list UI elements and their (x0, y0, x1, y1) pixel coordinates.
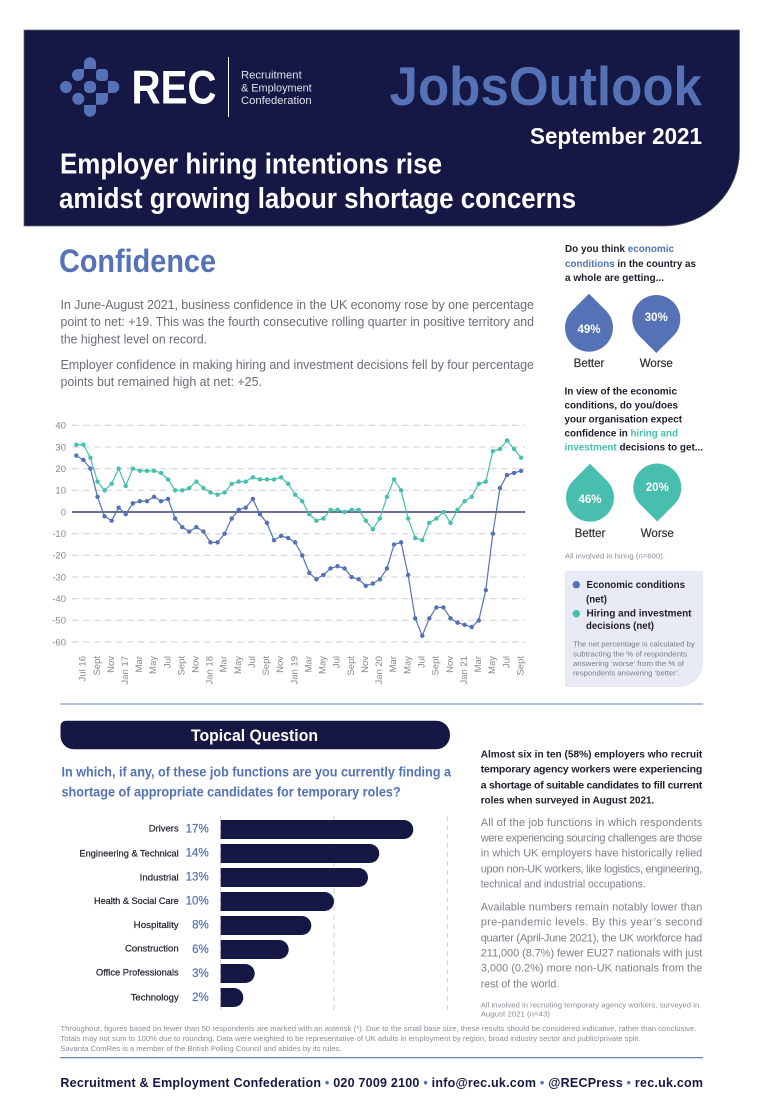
chart x axis labels: Jan 21 (459, 656, 470, 685)
footnotes: Savanta ComRes is a member of the British Polling Council and abides by its rules. (60, 1044, 341, 1053)
headline: Employer hiring intentions rise (60, 148, 442, 180)
bar category labels: Office Professionals (96, 968, 179, 979)
text block: workforce numbers: pre-pandemic levels. By this year’s second (481, 917, 702, 929)
chart x axis labels: Sept (431, 656, 442, 676)
chart x axis labels: Sept (176, 656, 187, 676)
chart x axis labels: Jul 16 (78, 656, 89, 681)
header banner (24, 30, 740, 226)
panel: chart legend (565, 571, 703, 687)
bar category labels: Hospitality (134, 920, 179, 931)
logo strapline (241, 69, 312, 107)
panel: hiring and investment question (564, 386, 703, 561)
question text (565, 243, 696, 284)
logo strapline: & Employment (241, 82, 312, 94)
chart x axis labels: Jul (247, 656, 258, 668)
question text: conditions in the country as (565, 258, 696, 270)
chart y axis labels: 40 (55, 421, 66, 432)
chart y axis labels: -30 (52, 572, 66, 583)
base note: topical question (481, 1001, 699, 1019)
legend: hiring and investment (573, 608, 692, 632)
footnotes: Throughout, figures based on fewer than 50 respondents are marked with an asterisk (*). Due to the small base size, these results should be considered indicative, rather than conclusive. (60, 1024, 696, 1033)
bar category labels: Drivers (149, 824, 179, 835)
chart y axis labels: 10 (55, 486, 66, 497)
chart x axis labels: Sept (516, 656, 526, 676)
question text: your organisation expect (564, 414, 682, 426)
chart x axis labels: Mar (473, 656, 484, 672)
chart x axis labels: Jul (416, 656, 428, 668)
legend: hiring and investment: Hiring and investment (586, 608, 692, 620)
bar values: 8% (192, 920, 209, 932)
chart x axis labels: Nov (190, 656, 202, 673)
text block: job functions: All of the job functions in which respondents (481, 817, 703, 829)
text block: topical summary bold: roles when surveyed in August 2021. (481, 794, 654, 806)
chart y axis labels: -50 (52, 616, 66, 627)
series: economic conditions (76, 456, 521, 636)
text block: confidence summary (60, 298, 534, 389)
bars (221, 820, 413, 1007)
text block: confidence summary: points but remained high at net: +25. (60, 375, 262, 389)
chart y axis labels: 20 (55, 464, 66, 475)
chart x axis labels: Sept (92, 656, 103, 676)
text block: confidence summary: In June-August 2021, business confidence in the UK economy rose by one percentage (60, 298, 534, 312)
legend: economic conditions: Economic conditions (586, 579, 685, 591)
chart x axis labels: Mar (134, 656, 145, 672)
logo divider (228, 57, 230, 117)
text block: workforce numbers: Available numbers remain notably lower than (481, 902, 702, 914)
legend note: respondents answering ‘better’. (573, 669, 680, 678)
footnotes (60, 1024, 696, 1053)
text block: workforce numbers: 3,000 (0.2%) more non-UK nationals from the (481, 963, 702, 975)
text block: topical summary bold: Almost six in ten (58%) employers who recruit (481, 748, 703, 760)
text block: workforce numbers (481, 902, 702, 990)
chart y axis labels: 0 (61, 507, 66, 518)
chart x axis labels: Jul (332, 656, 343, 668)
heading bar: Topical Question (60, 721, 450, 749)
legend note: answering ‘worse’ from the % of (573, 659, 685, 668)
question text: a whole are getting... (565, 272, 664, 284)
icon: drop better 46% (566, 464, 614, 522)
chart y axis labels: -40 (52, 594, 66, 605)
chart x axis labels: May (402, 656, 413, 674)
chart x axis labels: Mar (219, 656, 230, 672)
chart x axis labels: Sept (261, 656, 272, 676)
chart x axis labels: Jul (162, 656, 173, 668)
base note: topical question: All involved in recruiting temporary agency workers, surveyed in (481, 1001, 699, 1010)
icon: drop better 49%: 49% (577, 324, 601, 336)
series: hiring and investment decisions (76, 440, 521, 540)
bar category labels (79, 824, 179, 1004)
legend: economic conditions: (net) (586, 594, 607, 606)
question text: Do you think economic (565, 243, 674, 255)
bar values: 6% (192, 944, 209, 956)
chart x axis labels: Jan 17 (120, 656, 131, 685)
chart x axis labels: May (318, 656, 329, 674)
chart y axis labels: -10 (52, 529, 66, 540)
text block: topical summary bold: temporary agency workers were experiencing (481, 764, 702, 776)
bar chart: job function shortages (79, 816, 447, 1010)
chart y axis labels: 30 (55, 442, 66, 453)
chart x axis labels: Jan 19 (289, 656, 300, 685)
text block: job functions: upon non-UK workers, like logistics, engineering, (481, 863, 702, 875)
bar category labels: Technology (131, 993, 179, 1004)
bar category labels: Engineering & Technical (79, 849, 179, 860)
chart x axis labels: Jan 18 (205, 656, 216, 685)
icon: drop worse 30%: 30% (645, 312, 668, 324)
line chart: net confidence (52, 421, 526, 685)
bar category labels: Construction (125, 944, 179, 955)
text block: topical summary bold: a shortage of suitable candidates to fill current (481, 779, 703, 791)
icon: drop worse 20%: 20% (646, 482, 669, 494)
bar values (186, 824, 209, 1004)
chart x axis labels (78, 656, 526, 685)
icon: drop better 46%: 46% (578, 494, 602, 506)
chart x axis labels: Jan 20 (374, 656, 385, 685)
icon: drop worse 20% (633, 464, 681, 522)
chart x axis labels: May (487, 656, 498, 674)
question text: In which, if any, of these job functions are you currently finding a (62, 764, 451, 780)
text block: job functions: technical and industrial occupations. (481, 878, 646, 890)
logo strapline: Confederation (241, 95, 312, 107)
chart x axis labels: Sept (346, 656, 357, 676)
text block: confidence summary: point to net: +19. This was the fourth consecutive rolling quarter in positive territory and (60, 315, 534, 329)
question text: confidence in hiring and (564, 428, 678, 440)
logo wordmark: REC (132, 60, 216, 114)
bar values: 3% (192, 968, 209, 980)
bar values: 2% (192, 992, 209, 1004)
chart x axis labels: Nov (106, 656, 117, 673)
question text: conditions, do you/does (564, 399, 678, 411)
bar category labels: Industrial (140, 873, 179, 884)
chart y axis labels: -20 (52, 551, 66, 562)
bar values: 17% (186, 824, 209, 836)
text block: confidence summary: Employer confidence in making hiring and investment decisions fell by four percentage (60, 358, 534, 372)
heading: Confidence: Confidence (59, 243, 216, 279)
report date: September 2021 (530, 123, 702, 149)
icon: REC logo mark (60, 57, 119, 117)
chart y axis labels (52, 421, 66, 648)
bar values: 14% (186, 848, 209, 860)
question text: investment decisions to get... (564, 442, 703, 454)
question text: shortage of appropriate candidates for temporary roles? (62, 784, 401, 800)
chart x axis labels: May (233, 656, 244, 674)
legend: economic conditions (573, 579, 685, 606)
text block: job functions: in which UK employers have historically relied (481, 848, 702, 860)
base note: topical question: August 2021 (n=43) (481, 1010, 551, 1019)
text block: topical summary bold (481, 748, 703, 806)
headline (59, 148, 576, 215)
chart x axis labels: Mar (388, 656, 399, 672)
label: worse: Worse (641, 528, 674, 540)
chart y axis labels: -60 (52, 637, 66, 648)
question text: In view of the economic (564, 386, 677, 398)
chart x axis labels: May (148, 656, 159, 674)
bar values: 10% (186, 896, 209, 908)
text block: workforce numbers: 211,000 (8.7%) fewer EU27 nationals with just (481, 948, 702, 960)
text block: workforce numbers: quarter (April-June 2021), the UK workforce had (481, 933, 702, 945)
chart x axis labels: Jul (501, 656, 512, 668)
legend note (573, 640, 695, 678)
report title: JobsOutlook (390, 55, 702, 117)
base note: All involved in hiring (n=600). (565, 552, 665, 561)
legend note: The net percentage is calculated by (573, 640, 695, 649)
chart x axis labels: Nov (360, 656, 371, 673)
chart x axis labels: Mar (304, 656, 314, 672)
label: better: Better (574, 358, 605, 370)
text block: workforce numbers: rest of the world. (481, 978, 559, 990)
bar category labels: Health & Social Care (94, 896, 179, 907)
panel: economic conditions question (565, 243, 696, 370)
label: worse: Worse (640, 358, 673, 370)
text block: job functions: were experiencing sourcing challenges are those (480, 833, 702, 845)
text block: job functions (480, 817, 703, 890)
legend: hiring and investment: decisions (net) (586, 620, 654, 632)
question text (62, 764, 451, 800)
text block: confidence summary: the highest level on record. (60, 333, 207, 347)
chart x axis labels: Nov (445, 656, 456, 673)
heading bar: Topical Question: Topical Question (191, 726, 318, 745)
question text (564, 386, 703, 454)
headline: amidst growing labour shortage concerns (59, 183, 576, 215)
logo strapline: Recruitment (241, 69, 302, 81)
label: better: Better (575, 528, 606, 540)
footnotes: Totals may not sum to 100% due to rounding. Data were weighted to be representative of UK adults in employment by region, broad industry sector and public/private split. (60, 1034, 640, 1043)
legend note: subtracting the % of respondents (573, 650, 687, 659)
chart x axis labels: Nov (275, 656, 286, 673)
bar values: 13% (186, 872, 209, 884)
footer contact line: Recruitment & Employment Confederation • 020 7009 2100 • info@rec.uk.com • @RECPress • rec.uk.com (60, 1076, 703, 1090)
